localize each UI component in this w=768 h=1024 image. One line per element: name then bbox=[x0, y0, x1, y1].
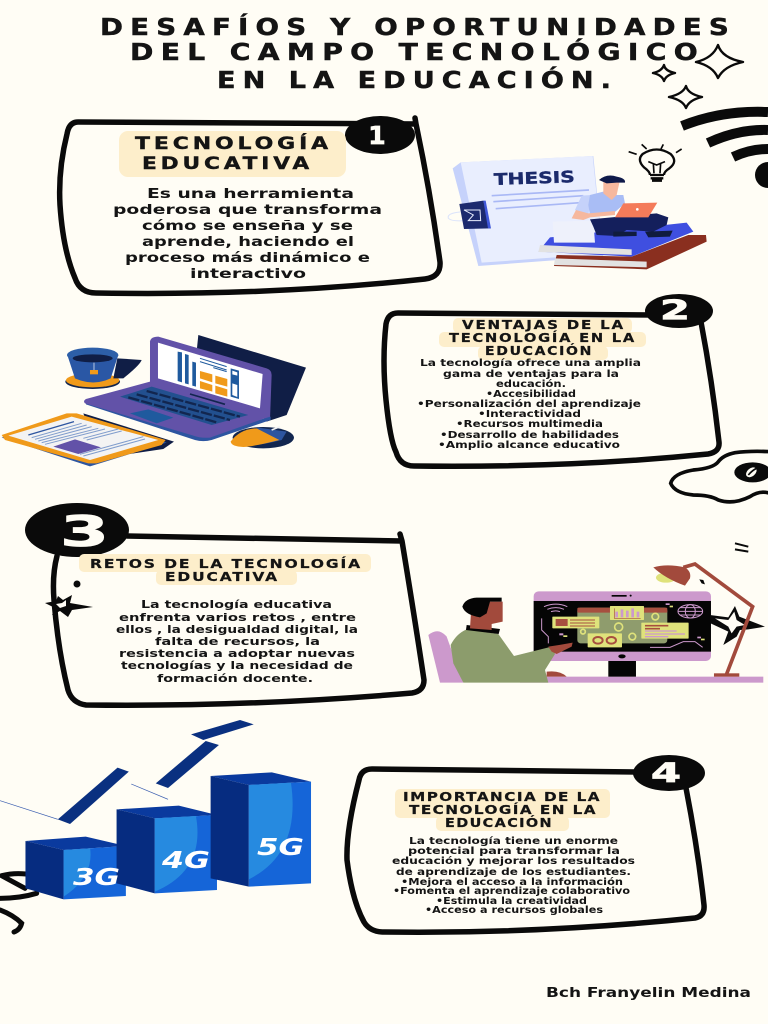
body text 2: gama de ventajas para la bbox=[443, 369, 619, 380]
heading label 4: IMPORTANCIA DE LA bbox=[403, 789, 601, 804]
heading label 2: VENTAJAS DE LA bbox=[462, 317, 625, 332]
panel frame 3 bbox=[53, 534, 424, 705]
chart: 3G 4G 5G rising bars: 5G bbox=[257, 835, 304, 861]
heading label 1: EDUCATIVA bbox=[142, 154, 313, 174]
body text 2: •Accesibilidad bbox=[486, 389, 576, 400]
body text 1: aprende, haciendo el bbox=[142, 235, 354, 250]
chart: 3G 4G 5G rising bars: 3G bbox=[73, 865, 120, 891]
heading label 3: RETOS DE LA TECNOLOGÍA bbox=[90, 556, 362, 571]
icon: sparkle stars bbox=[653, 45, 743, 108]
body text 3: resistencia a adoptar nuevas bbox=[119, 647, 356, 660]
body text 1: cómo se enseña y se bbox=[142, 219, 353, 234]
body text 4: educación y mejorar los resultados bbox=[392, 855, 635, 867]
body text 1: poderosa que transforma bbox=[113, 203, 382, 218]
body text 3 bbox=[116, 598, 358, 685]
body text 2: •Recursos multimedia bbox=[456, 419, 603, 430]
body text 1 bbox=[113, 187, 382, 282]
panel frame 1 bbox=[60, 118, 440, 293]
heading label 2 bbox=[439, 317, 646, 360]
heading label 1 bbox=[119, 131, 346, 177]
heading label 2: TECNOLOGÍA EN LA bbox=[449, 330, 636, 345]
number badge 3: 3 bbox=[60, 507, 109, 556]
body text 2: educación. bbox=[496, 378, 566, 390]
body text 1: Es una herramienta bbox=[147, 187, 354, 202]
illustration: thesis and student on books: THESIS bbox=[493, 167, 575, 189]
icon: wifi signal bbox=[682, 112, 768, 188]
body text 2: •Desarrollo de habilidades bbox=[440, 430, 619, 441]
body text 3: enfrenta varios retos , entre bbox=[119, 611, 356, 624]
heading label 1: TECNOLOGÍA bbox=[135, 132, 332, 154]
panel frame 2 bbox=[384, 313, 719, 466]
body text 4: •Estimula la creatividad bbox=[436, 896, 587, 907]
illustration: laptop, cup, tablet and mouse bbox=[2, 335, 306, 466]
panel: ventajas bbox=[384, 294, 719, 466]
body text 4 bbox=[392, 835, 635, 916]
icon: scribble bottom left bbox=[0, 874, 37, 932]
body text 2: •Interactividad bbox=[478, 409, 581, 420]
body text 4: •Fomenta el aprendizaje colaborativo bbox=[393, 886, 630, 897]
body text 4: potencial para transformar la bbox=[408, 846, 620, 857]
body text 2 bbox=[417, 357, 641, 451]
body text 2: La tecnología ofrece una amplia bbox=[420, 357, 641, 369]
number badge 4: 4 bbox=[651, 758, 681, 789]
icon: scribble blob bbox=[671, 451, 768, 502]
body text 3: formación docente. bbox=[157, 672, 313, 685]
icon: light bulb bbox=[629, 144, 682, 181]
heading label 3 bbox=[79, 554, 371, 585]
icon: ink star left bbox=[45, 580, 93, 617]
panel: importancia bbox=[347, 755, 705, 932]
body text 4: •Acceso a recursos globales bbox=[425, 905, 603, 916]
body text 4: •Mejora el acceso a la información bbox=[401, 876, 623, 888]
title bbox=[100, 13, 736, 94]
panel frame 4 bbox=[347, 769, 704, 932]
number badge 1: 1 bbox=[368, 121, 386, 150]
heading label 3: EDUCATIVA bbox=[165, 569, 279, 584]
heading label 4: EDUCACIÓN bbox=[445, 815, 553, 830]
body text 2: •Personalización del aprendizaje bbox=[417, 398, 641, 410]
illustration: person at computer with desk lamp bbox=[428, 543, 765, 683]
body text 3: tecnologías y la necesidad de bbox=[121, 659, 353, 672]
illustration: thesis and student on books bbox=[448, 156, 707, 269]
number badge 3 bbox=[25, 503, 129, 557]
body text 1: interactivo bbox=[190, 267, 306, 282]
body text 3: falta de recursos, la bbox=[155, 635, 320, 648]
chart: 3G 4G 5G rising bars bbox=[0, 720, 311, 899]
body text 4: La tecnología tiene un enorme bbox=[409, 835, 618, 847]
author credit: Bch Franyelin Medina bbox=[546, 986, 751, 1001]
number badge 1 bbox=[345, 116, 415, 154]
body text 3: La tecnología educativa bbox=[141, 598, 332, 611]
title: EN LA EDUCACIÓN. bbox=[217, 66, 618, 94]
panel: retos bbox=[25, 503, 424, 705]
panel: tecnología educativa bbox=[60, 116, 440, 293]
heading label 2: EDUCACIÓN bbox=[485, 343, 593, 358]
body text 3: ellos , la desigualdad digital, la bbox=[116, 623, 358, 636]
number badge 4 bbox=[633, 755, 705, 791]
number badge 2: 2 bbox=[660, 295, 690, 326]
title: DESAFÍOS Y OPORTUNIDADES bbox=[100, 13, 736, 41]
body text 2: •Amplio alcance educativo bbox=[438, 440, 620, 451]
chart: 3G 4G 5G rising bars: 4G bbox=[161, 848, 210, 874]
title: DEL CAMPO TECNOLÓGICO bbox=[130, 38, 705, 66]
number badge 2 bbox=[645, 294, 713, 328]
body text 1: proceso más dinámico e bbox=[125, 251, 370, 266]
body text 4: de aprendizaje de los estudiantes. bbox=[396, 867, 631, 878]
heading label 4: TECNOLOGÍA EN LA bbox=[409, 802, 597, 817]
heading label 4 bbox=[395, 789, 610, 831]
